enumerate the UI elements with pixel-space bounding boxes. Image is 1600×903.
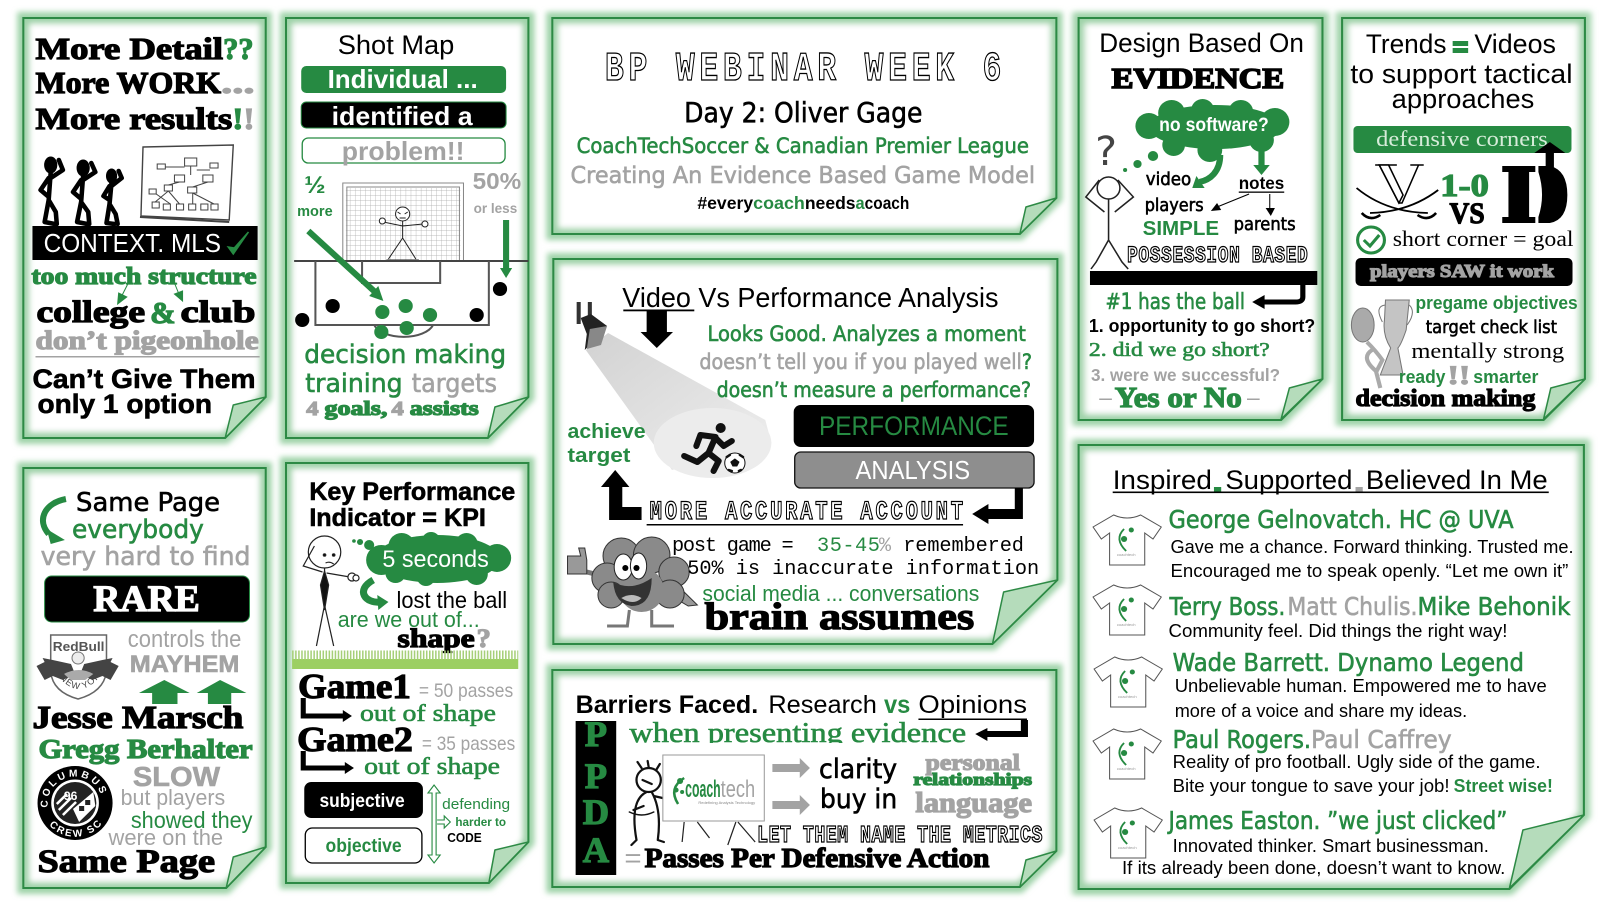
text: can't give them only 1 option: Can’t Give Them	[32, 364, 256, 394]
panel: barriers faced	[552, 670, 1056, 887]
text: george gelnovatch: Gave me a chance. Forward thinking. Trusted me.	[1171, 536, 1574, 557]
text: players parents simple: SIMPLE	[1143, 218, 1219, 240]
pill: players saw it work: players SAW it work	[1370, 261, 1555, 281]
arrow: same page to everybody	[43, 499, 66, 544]
icon: check circle	[1358, 227, 1384, 253]
icon: grass	[292, 655, 518, 669]
panel: key performance indicator	[286, 463, 528, 883]
arrows: structure to college and club	[118, 283, 183, 304]
text: decision making: decision making	[1356, 385, 1535, 412]
heading: barriers faced: Research	[768, 691, 877, 719]
logo: red bull new york: RedBull	[53, 639, 104, 654]
text: video: video	[1146, 169, 1191, 190]
text: are we out of shape: shape	[398, 624, 475, 653]
text: question list: 2. did we go short?	[1089, 339, 1270, 361]
hashtag: a	[856, 193, 866, 213]
panel frame	[1342, 18, 1585, 420]
heading: trends videos: to support tactical	[1350, 58, 1573, 89]
banner: rare: RARE	[93, 579, 200, 620]
text: paul rogers paul caffrey: Paul Rogers.	[1173, 724, 1311, 754]
pill: defensive corners	[1353, 126, 1571, 153]
text: yes or no: –	[1099, 385, 1112, 410]
text: training targets	[305, 369, 497, 399]
panel: more detail	[23, 18, 266, 438]
chart: shot dots	[295, 282, 507, 339]
text: very hard to find: very hard to find	[41, 542, 251, 572]
panel frame	[23, 468, 266, 888]
pill: individual: Individual ...	[328, 64, 478, 94]
text: brain assumes: brain assumes	[704, 596, 974, 638]
text: question list	[1089, 315, 1315, 385]
text: personal relationships language: personal	[926, 750, 1020, 776]
heading: trends videos: approaches	[1392, 83, 1534, 114]
icon: shirt 1: coachtech	[1117, 552, 1136, 557]
subtitle: topic: Creating An Evidence Based Game Model	[571, 161, 1035, 189]
text: paul rogers paul caffrey: Street wise!	[1454, 775, 1553, 796]
text: post game remembered: post game =	[672, 535, 794, 558]
text: too much structure: too much structure	[31, 263, 257, 290]
banner: PPDA: P	[585, 756, 607, 796]
heading: design based on evidence: EVIDENCE	[1112, 64, 1284, 95]
heading: KPI	[309, 478, 515, 532]
pill: problem	[302, 136, 505, 166]
logo: columbus crew: COLUMBUS	[40, 770, 106, 808]
text: slow but players: were on the	[108, 825, 223, 850]
text: personal relationships language: language	[915, 788, 1032, 819]
pill: players saw it work	[1356, 258, 1573, 286]
panel frame	[286, 18, 528, 438]
banner: rare	[45, 576, 249, 622]
icon: shirt 1	[1093, 515, 1161, 565]
label: half more: ½	[304, 172, 326, 199]
heading: trends videos	[1350, 28, 1573, 114]
icon: spotlight lamp	[577, 302, 607, 350]
text: post game remembered	[672, 535, 1024, 558]
text: clarity buy in: clarity	[819, 754, 897, 785]
text: game 2: out of shape	[364, 753, 500, 780]
text: terry boss matt chulis mike behonik: Matt Chulis.	[1287, 591, 1418, 621]
icon: thought bubbles and question mark: ?	[1095, 128, 1117, 175]
callout: no software cloud: no software?	[1159, 115, 1269, 136]
pill: objective: objective	[326, 836, 402, 857]
hashtag	[697, 193, 909, 213]
text: players parents simple: players	[1145, 195, 1204, 216]
text: paul rogers paul caffrey: Paul Caffrey	[1311, 724, 1452, 754]
pill: analysis: ANALYSIS	[856, 457, 970, 485]
text: players parents simple: parents	[1234, 214, 1296, 235]
title: BP webinar week 6: BP WEBINAR WEEK 6	[605, 46, 1001, 92]
text: decision making: decision making	[304, 340, 506, 370]
text: clarity buy in: buy in	[820, 784, 897, 815]
text: game 2	[297, 720, 515, 780]
arrow: opinions to evidence	[975, 720, 1028, 741]
text: target check list: target check list	[1426, 317, 1557, 338]
hashtag: needs	[805, 193, 856, 213]
text: ready smarter: smarter	[1473, 366, 1539, 387]
text: george gelnovatch: Encouraged me to speak openly. “Let me own it”	[1171, 560, 1568, 581]
text: same page closing: Same Page	[38, 843, 215, 880]
text: ready smarter	[1399, 360, 1539, 390]
text: terry boss matt chulis mike behonik	[1168, 591, 1571, 641]
heading: more detail: ...	[221, 65, 255, 100]
text: players parents simple	[1143, 195, 1296, 240]
heading: more detail: More Detail	[35, 31, 223, 66]
heading: KPI: Key Performance	[309, 478, 515, 506]
heading: design based on evidence	[1099, 27, 1304, 95]
banner: context MLS: CONTEXT. MLS	[44, 230, 221, 258]
arrow: up to corners	[1534, 142, 1565, 170]
logo: red bull new york	[36, 634, 119, 700]
text: training targets: training	[305, 369, 403, 399]
panel: trends	[1342, 18, 1585, 420]
icon: brain mascot	[568, 537, 697, 626]
text: same page everybody: everybody	[72, 515, 204, 545]
pill: performance	[794, 405, 1034, 447]
icon: spotlight beam	[586, 333, 771, 478]
heading: inspired supported believed: Supported	[1225, 464, 1352, 495]
icon: shirt 2: coachtech	[1117, 622, 1136, 627]
text: doesn't measure: doesn’t measure a performance?	[717, 377, 1031, 402]
panel frame	[552, 18, 1056, 234]
heading: inspired supported believed: Inspired	[1113, 464, 1212, 495]
text: more accurate account: MORE ACCURATE ACCOUNT	[650, 498, 963, 528]
icon: presenter	[629, 761, 680, 845]
arrows: cloud to video and notes	[1192, 148, 1270, 188]
text: looks good: Looks Good. Analyzes a moment	[707, 321, 1026, 346]
text: wade barrett: Wade Barrett. Dynamo Legend	[1173, 647, 1524, 677]
logo: virginia	[1357, 165, 1438, 218]
text: paul rogers paul caffrey: Bite your tongue to save your job!	[1173, 775, 1450, 796]
label: half more: more	[297, 204, 333, 220]
icon: coachtech board: Redefining Analysis Technology	[698, 800, 755, 805]
text: james easton: Innovated thinker. Smart businessman.	[1173, 835, 1489, 856]
text: wade barrett	[1173, 647, 1547, 721]
arrow: subjective objective range	[428, 785, 450, 863]
text: 4 goals 4 assists: 4	[306, 398, 318, 420]
text: college and club: &	[150, 295, 175, 330]
subtitle: day 2: Day 2: Oliver Gage	[684, 96, 922, 129]
icon: runner with ball	[684, 424, 745, 473]
banner: PPDA	[576, 714, 616, 875]
text: game 2: Game2	[297, 720, 413, 759]
text: don't pigeonhole: don’t pigeonhole	[35, 326, 259, 355]
hashtag: coach	[753, 193, 805, 213]
heading: video vs performance analysis: Video Vs Performance Analysis	[622, 282, 999, 313]
text: controls the mayhem	[128, 626, 241, 678]
text: possession based: POSSESSION BASED	[1127, 244, 1308, 270]
arrows: up	[139, 680, 246, 704]
text: slow but players: but players	[121, 785, 225, 810]
text: are we out of shape: ?	[477, 624, 491, 653]
text: james easton	[1122, 805, 1507, 878]
text: game 1	[298, 667, 513, 727]
text: score 1-0: 1-0	[1440, 168, 1489, 204]
text: let them name the metrics: LET THEM NAME THE METRICS	[757, 823, 1043, 850]
icon: shirt 2	[1093, 585, 1161, 635]
text: ready smarter: !!	[1447, 360, 1470, 390]
text: vs: VS	[1450, 196, 1485, 230]
label: 50% or less	[473, 168, 521, 216]
icon: goalkeeper	[379, 207, 428, 260]
heading: more detail: More WORK	[35, 65, 222, 100]
text: james easton: James Easton. ”we just clicked”	[1167, 805, 1507, 835]
logo: columbus crew: CREW SC	[50, 820, 101, 837]
heading: trends videos: Videos	[1474, 28, 1556, 59]
text: mentally strong: mentally strong	[1411, 338, 1564, 363]
heading: more detail: !	[232, 101, 243, 136]
text: achieve target: achieve	[568, 421, 646, 443]
text: paul rogers paul caffrey: Reality of pro football. Ugly side of the game.	[1173, 751, 1540, 772]
arrow: half more	[308, 231, 383, 301]
arrow: analysis to account	[972, 488, 1023, 524]
panel frame	[552, 670, 1056, 887]
heading: KPI: Indicator = KPI	[309, 504, 486, 532]
text: james easton: If its already been done, doesn’t want to know.	[1122, 857, 1505, 878]
banner: PPDA: A	[583, 830, 609, 870]
heading: inspired supported believed: Believed In Me	[1366, 464, 1548, 495]
text: short corner goal: short corner = goal	[1393, 226, 1574, 251]
text: yes or no: –	[1247, 385, 1260, 410]
panel frame	[1079, 18, 1322, 420]
text: defending harder to code: CODE	[447, 830, 482, 845]
text: achieve target	[568, 421, 646, 467]
text: achieve target: target	[568, 445, 631, 467]
arrow: to lost the ball	[363, 580, 388, 610]
label: 50% or less: or less	[474, 200, 517, 216]
label: half more	[297, 172, 333, 220]
panel: shot map	[286, 18, 528, 438]
text: post game remembered: %	[879, 535, 892, 558]
heading: barriers faced: Barriers Faced.	[576, 691, 758, 719]
text: game 2: = 35 passes	[422, 734, 515, 755]
icon: shirt 4: coachtech	[1117, 766, 1136, 771]
text: notes: notes	[1239, 172, 1284, 193]
text: same page everybody	[72, 488, 220, 545]
text: controls the mayhem: controls the	[128, 626, 241, 653]
text: same page everybody: Same Page	[76, 488, 220, 518]
icon: shirt 5: coachtech	[1118, 845, 1137, 850]
text: doesn't tell you: doesn’t tell you if you played well	[699, 349, 1022, 374]
divider	[35, 356, 260, 358]
text: terry boss matt chulis mike behonik: Mike Behonik	[1418, 591, 1571, 621]
icon: coachtech board: tech	[721, 776, 755, 803]
arrow: 50% or less	[500, 220, 512, 278]
pill: analysis	[795, 452, 1034, 488]
arrow: video down	[641, 311, 673, 348]
icon: penalty area	[294, 261, 528, 337]
text: game 1: Game1	[298, 667, 411, 706]
text: can't give them only 1 option: only 1 option	[38, 389, 212, 419]
text: college and club: college	[37, 294, 145, 329]
text: question list: 1. opportunity to go short?	[1089, 315, 1315, 336]
text: pregame objectives: pregame objectives	[1415, 292, 1578, 313]
text: terry boss matt chulis mike behonik: Community feel. Did things the right way!	[1168, 620, 1507, 641]
arrow: floor to has the ball	[1252, 285, 1303, 309]
panel frame	[286, 463, 528, 883]
text: 4 goals 4 assists: assists	[410, 398, 479, 420]
pill: subjective	[304, 782, 423, 818]
icon: goal and net	[343, 183, 463, 261]
callout: no software cloud	[1135, 99, 1289, 162]
heading: design based on evidence: Design Based On	[1099, 27, 1304, 58]
heading: barriers faced: vs	[884, 691, 910, 719]
panel: inspired supported believed in me	[1079, 445, 1584, 889]
heading: more detail: ??	[223, 31, 254, 66]
text: 4 goals 4 assists	[306, 398, 479, 420]
callout: 5 seconds cloud	[366, 532, 511, 586]
hashtag: #every	[697, 193, 753, 213]
text: ready smarter: ready	[1399, 366, 1446, 387]
text: personal relationships language: relationships	[913, 770, 1032, 789]
text: 4 goals 4 assists: goals,	[325, 398, 387, 420]
logo: columbus crew: 96	[64, 789, 78, 803]
text: wade barrett: more of a voice and share my ideas.	[1175, 700, 1467, 721]
text: terry boss matt chulis mike behonik: Terry Boss.	[1169, 591, 1285, 621]
text: doesn't tell you: ?	[1022, 349, 1032, 374]
panel frame	[1079, 445, 1584, 889]
text: defending harder to code: defending	[442, 797, 510, 813]
text: are we out of shape: are we out of...	[338, 606, 480, 632]
text: social media conversations: social media ... conversations	[702, 580, 979, 606]
icon: shirt 3: coachtech	[1118, 694, 1137, 699]
icon: shirt 4	[1093, 729, 1161, 779]
text: has the ball: #1 has the ball	[1105, 289, 1245, 315]
text: passes per defensive action: =	[624, 843, 642, 873]
panel: video vs performance analysis	[553, 259, 1057, 644]
text: 4 goals 4 assists: 4	[391, 398, 404, 420]
bar: floor	[1090, 271, 1317, 285]
text: college and club: club	[181, 294, 256, 329]
arrows: notes to players and parents	[1211, 194, 1275, 216]
text: slow but players: showed they	[131, 807, 253, 833]
panel: design based on evidence	[1079, 18, 1322, 420]
callout: 5 seconds cloud: 5 seconds	[382, 546, 489, 573]
icon: trophy and figure	[1351, 300, 1412, 388]
text: yes or no: Yes or No	[1115, 383, 1242, 414]
hashtag: coach	[865, 193, 909, 213]
banner: context MLS	[32, 226, 258, 260]
pill: identified a: identified a	[332, 101, 473, 131]
heading: more detail: More results	[35, 101, 232, 136]
text: inaccurate information: 50% is inaccurate information	[687, 558, 1039, 581]
text: clarity buy in	[819, 754, 897, 815]
panel frame	[23, 18, 266, 438]
text: controls the mayhem: MAYHEM	[130, 651, 239, 678]
text: can't give them only 1 option	[32, 364, 256, 419]
text: when presenting evidence: when presenting evidence	[629, 717, 966, 749]
pill: defensive corners: defensive corners	[1376, 126, 1548, 151]
arrows: to clarity and buy in	[772, 758, 810, 815]
text: college and club	[37, 294, 256, 330]
text: post game remembered: remembered	[903, 535, 1024, 558]
pill: performance: PERFORMANCE	[819, 410, 1009, 441]
logo: columbus crew	[38, 766, 113, 840]
text: are we out of shape	[338, 606, 491, 653]
panel: same page	[14, 458, 276, 898]
heading: barriers faced	[576, 691, 1027, 720]
panel: title	[552, 18, 1056, 234]
label: 50% or less: 50%	[473, 168, 521, 194]
icon: thought bubbles	[352, 539, 374, 550]
text: defending harder to code: harder to	[455, 815, 506, 829]
banner: PPDA: D	[583, 792, 609, 832]
icon: shirt 5	[1094, 808, 1162, 858]
pill: objective	[305, 828, 422, 863]
text: question list: 3. were we successful?	[1091, 364, 1280, 385]
text: training targets: targets	[412, 369, 497, 399]
icon: coachtech board	[663, 755, 764, 845]
icon: stick figure with stopwatch	[303, 536, 359, 646]
panel frame	[553, 259, 1057, 644]
text: slow but players	[108, 760, 253, 850]
icon: thought bubbles and question mark	[1095, 128, 1158, 175]
text: jesse marsch: Jesse Marsch	[32, 699, 243, 735]
heading: more detail: !	[243, 101, 255, 136]
icon: flowchart board	[140, 145, 233, 222]
text: george gelnovatch	[1168, 504, 1574, 581]
text: paul rogers paul caffrey	[1173, 724, 1553, 796]
text: personal relationships language	[913, 750, 1032, 819]
heading: inspired supported believed	[1113, 464, 1549, 495]
text: wade barrett: Unbelievable human. Empowered me to have	[1175, 675, 1547, 696]
icon: coachtech board: coach	[685, 776, 721, 803]
icon: three thinking figures	[41, 157, 122, 224]
text: george gelnovatch: George Gelnovatch. HC @ UVA	[1168, 504, 1514, 534]
text: passes per defensive action: Passes Per Defensive Action	[645, 843, 989, 873]
text: game 1: = 50 passes	[419, 681, 513, 702]
banner: PPDA: P	[585, 714, 607, 754]
heading: more detail	[35, 31, 255, 136]
icon: stick figure	[1086, 177, 1133, 269]
heading: trends videos: Trends	[1366, 28, 1446, 59]
subtitle: organisations: CoachTechSoccer & Canadian Premier League	[577, 134, 1029, 159]
text: defending harder to code	[442, 797, 510, 845]
text: slow but players: SLOW	[133, 760, 220, 792]
heading: shot map: Shot Map	[338, 30, 454, 60]
pill: problem: problem!!	[342, 136, 465, 166]
arrow: account to target	[601, 470, 642, 520]
icon: shirt 3	[1094, 657, 1162, 707]
text: lost the ball: lost the ball	[397, 588, 507, 614]
text: post game remembered: 35-45	[817, 535, 880, 558]
text: game 1: out of shape	[360, 700, 496, 727]
pill: identified a	[301, 101, 506, 131]
text: gregg berhalter: Gregg Berhalter	[39, 734, 253, 764]
heading: barriers faced: Opinions	[918, 691, 1027, 719]
logo: block D	[1502, 166, 1567, 223]
pill: subjective: subjective	[319, 791, 405, 812]
